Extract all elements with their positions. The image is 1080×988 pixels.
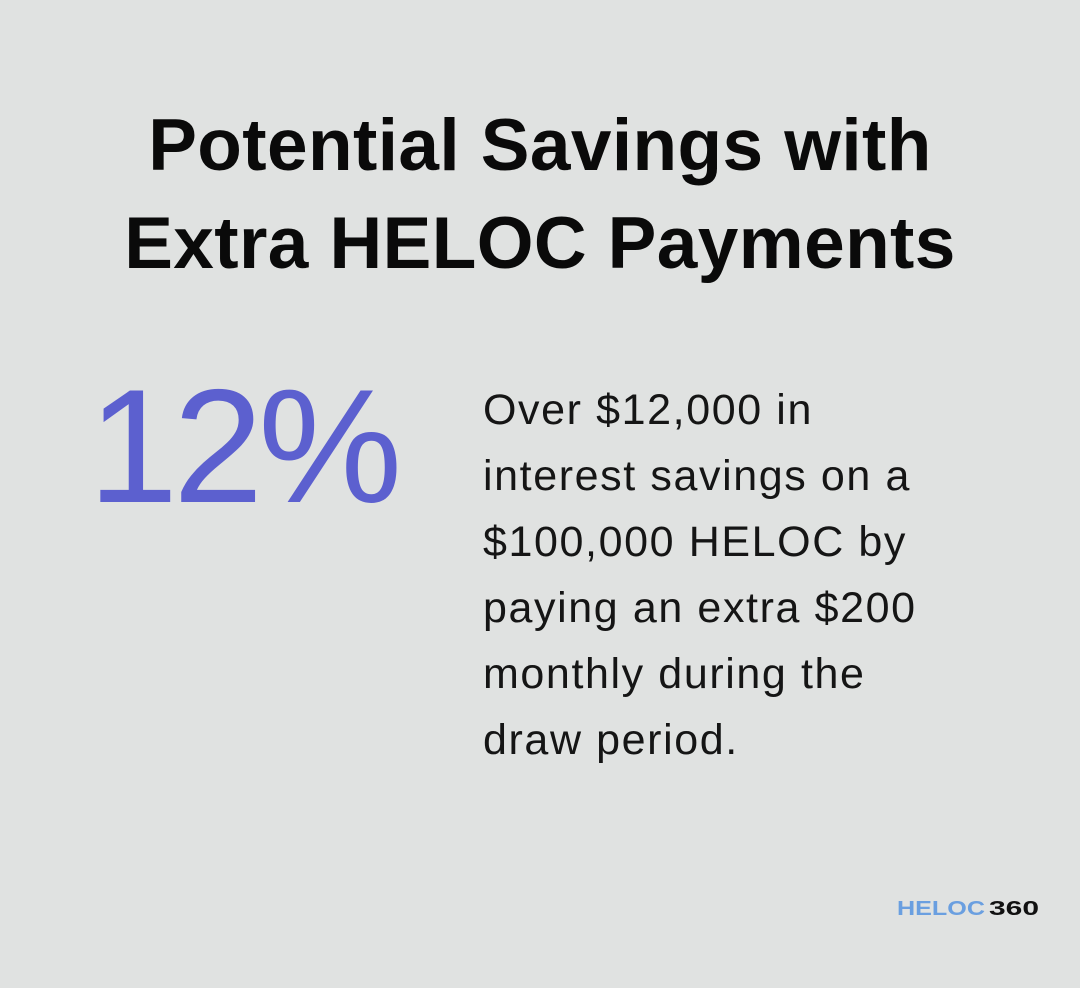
- title: Extra HELOC Payments: [124, 203, 956, 284]
- logo: HELOC360: [897, 898, 1039, 920]
- description text: $100,000 HELOC by: [483, 518, 907, 566]
- description text: monthly during the: [483, 650, 866, 698]
- big stat: 12%: 12%: [88, 356, 397, 537]
- description text: Over $12,000 in: [483, 386, 813, 434]
- title: Potential Savings with: [148, 105, 932, 186]
- title: [124, 105, 956, 284]
- logo: HELOC360: 360: [989, 898, 1039, 920]
- logo: HELOC360: HELOC: [897, 898, 985, 920]
- description text: [483, 386, 917, 764]
- description text: paying an extra $200: [483, 584, 917, 632]
- description text: interest savings on a: [483, 452, 911, 500]
- description text: draw period.: [483, 716, 739, 764]
